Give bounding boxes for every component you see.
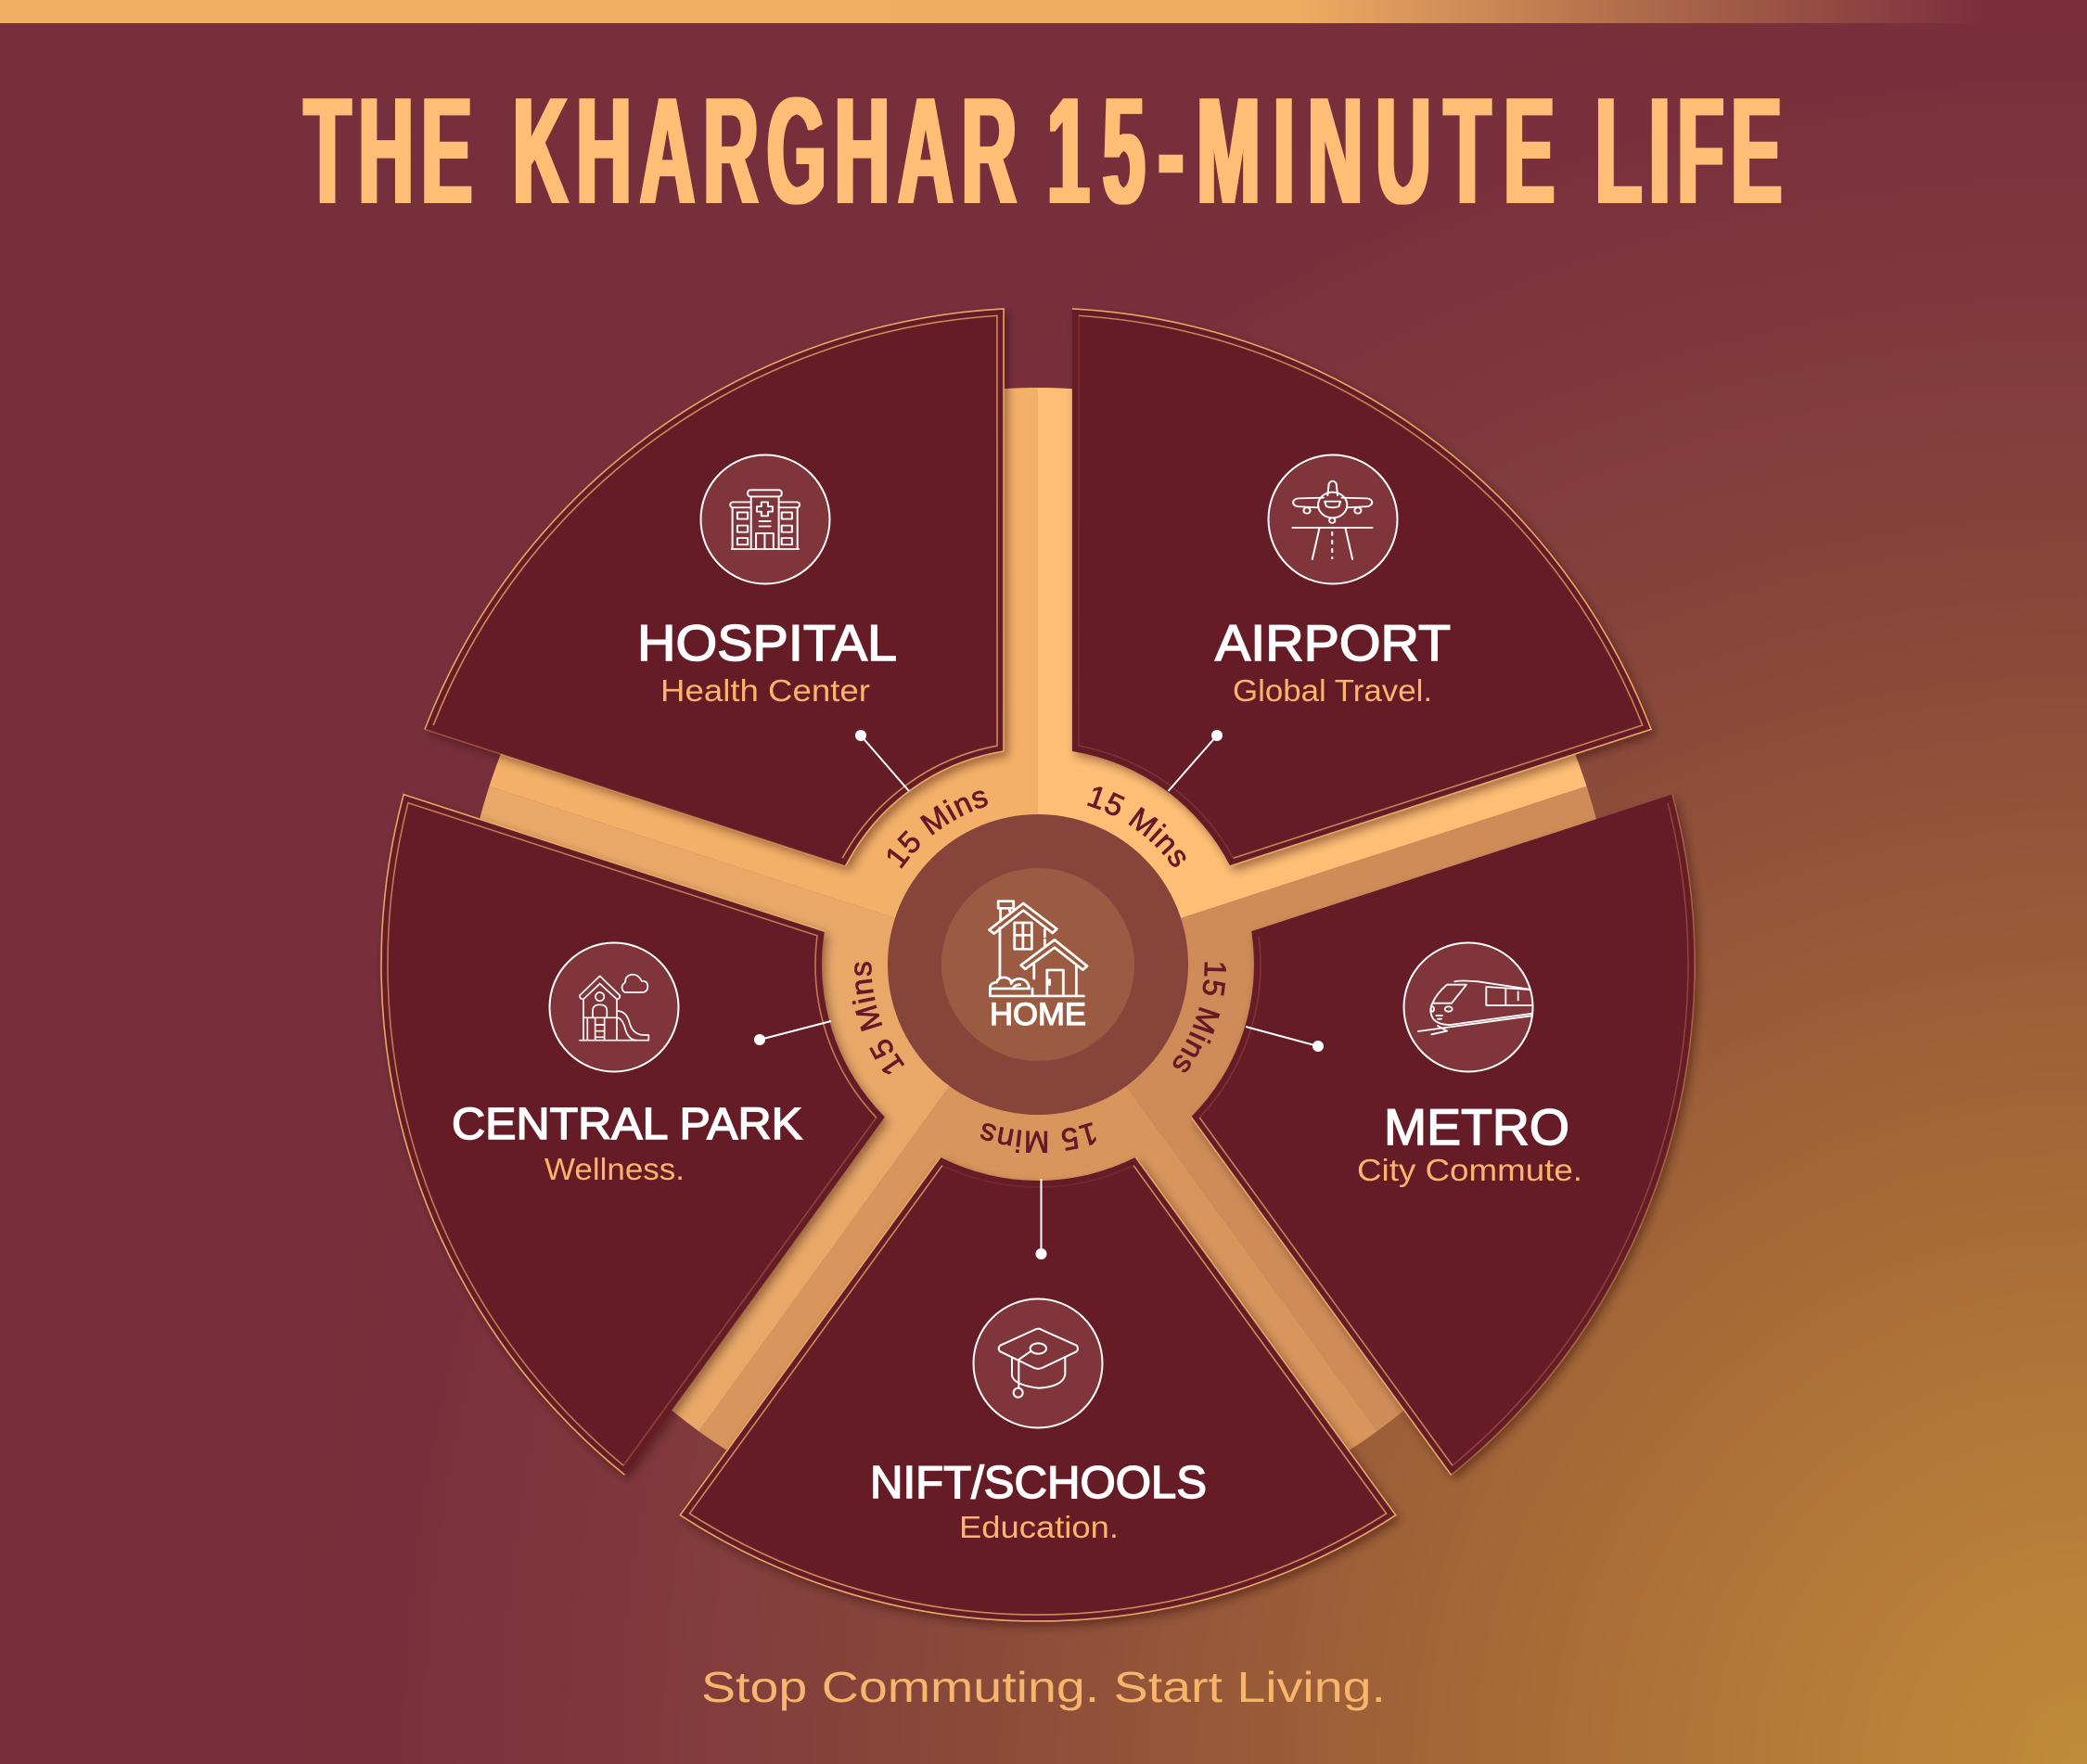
connector: airport: [1169, 730, 1223, 791]
spoke slice: park: [461, 786, 1038, 1431]
spoke slice: metro: [1038, 786, 1615, 1431]
title: KHARGHAR: [513, 67, 1017, 236]
top accent bar: [0, 0, 2087, 23]
spoke slice: airport: [1038, 388, 1587, 965]
subheading: metro: City Commute.: [1357, 1153, 1582, 1187]
icon: playground: [580, 975, 648, 1041]
icon: graduation cap: [999, 1329, 1078, 1398]
home label: HOME: [990, 997, 1086, 1032]
ring label: hospital 15 mins: 15 Mins: [888, 790, 988, 869]
icon: airport: [1292, 481, 1373, 559]
icon: home: [989, 901, 1087, 996]
subheading: schools: Education.: [959, 1510, 1119, 1544]
spoke slice: schools: [698, 965, 1377, 1541]
ring label: park 15 mins: 15 Mins: [851, 962, 905, 1074]
icon circle: hospital: [701, 454, 829, 584]
ring label: schools 15 mins: 15 Mins: [980, 1122, 1096, 1154]
panel: airport sector: [862, 224, 1713, 1019]
tagline: Stop Commuting. Start Living.: [701, 1663, 1386, 1711]
ring label: airport 15 mins: 15 Mins: [1087, 786, 1185, 867]
hub: outer circle: [888, 814, 1188, 1115]
title: 15-MINUTE: [1047, 67, 1555, 236]
spoke wheel: [461, 388, 1615, 1541]
subheading: central park: Wellness.: [544, 1152, 685, 1186]
icon circle: schools: [974, 1298, 1102, 1428]
connector: central park: [754, 1021, 831, 1045]
hub: inner circle: [941, 868, 1134, 1061]
icon circle: airport: [1269, 454, 1397, 584]
heading: schools: NIFT/SCHOOLS: [870, 1458, 1207, 1508]
heading: hospital: HOSPITAL: [637, 614, 897, 671]
icon: hospital: [730, 490, 800, 549]
title: [304, 67, 1782, 236]
ring label: metro 15 mins: 15 Mins: [1172, 962, 1226, 1072]
panel: schools sector: [680, 1157, 1396, 1621]
icon circle: metro: [1404, 942, 1532, 1072]
connector: schools: [1035, 1179, 1046, 1259]
panel: metro sector: [1110, 684, 1773, 1508]
heading: metro: METRO: [1384, 1098, 1569, 1156]
title: LIFE: [1595, 67, 1782, 236]
subheading: hospital: Health Center: [660, 673, 870, 708]
connector: metro: [1246, 1027, 1324, 1052]
panel: hospital sector: [363, 224, 1214, 1019]
subheading: airport: Global Travel.: [1233, 673, 1432, 708]
icon circle: central park: [549, 942, 679, 1072]
connector: hospital: [855, 730, 909, 791]
panel: central park sector: [302, 684, 966, 1508]
heading: central park: CENTRAL PARK: [452, 1100, 802, 1149]
title: THE: [304, 67, 472, 236]
heading: airport: AIRPORT: [1215, 614, 1451, 671]
icon: metro: [1418, 980, 1533, 1034]
spoke slice: hospital: [489, 388, 1038, 965]
